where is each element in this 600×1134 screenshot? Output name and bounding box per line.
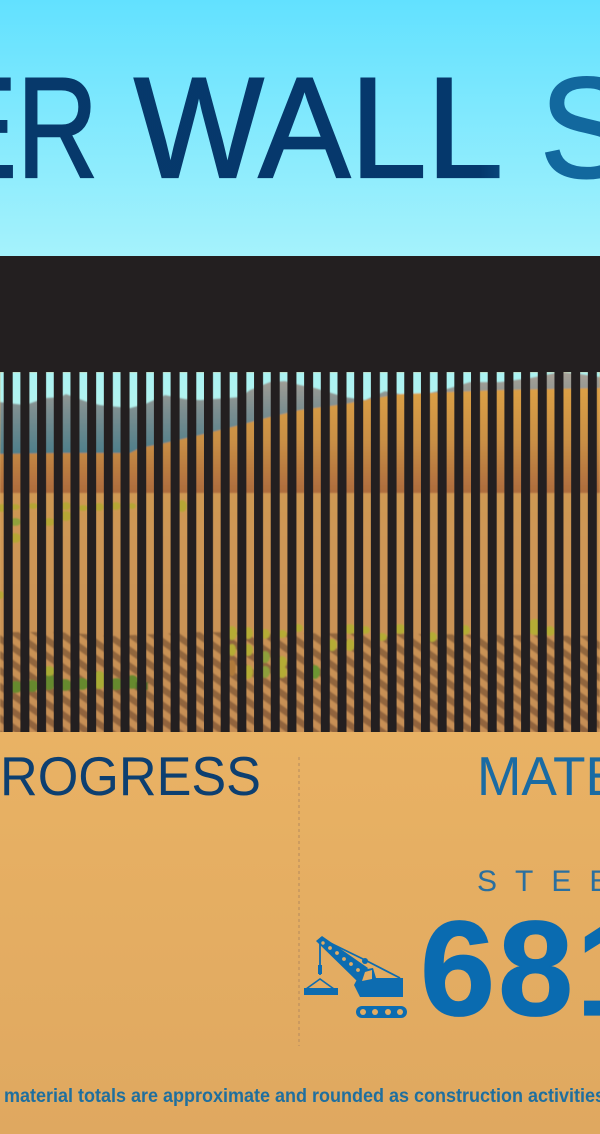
crane cab <box>354 968 403 997</box>
wall: solid top panel <box>0 256 600 372</box>
crane tracks <box>356 1006 407 1018</box>
desert landscape scene <box>0 372 600 733</box>
sky behind the fence <box>0 372 600 442</box>
icon: crane <box>304 936 407 1018</box>
scrub: lower left <box>9 666 148 693</box>
scrub: upper left <box>0 500 187 599</box>
foreground dune <box>0 388 600 494</box>
fence shadow stripes <box>0 632 600 733</box>
distant mountains <box>0 372 600 460</box>
sky background <box>0 0 600 256</box>
sand panel background <box>0 732 600 1134</box>
heading: progress: ROGRESS <box>0 745 261 807</box>
crane cable <box>320 938 400 978</box>
crane boom <box>316 936 368 982</box>
scrub: centre <box>227 619 555 679</box>
title <box>0 49 600 208</box>
desert floor <box>0 493 600 733</box>
title: WALL <box>134 49 503 208</box>
wall: steel slats <box>0 370 600 732</box>
crane load <box>306 979 334 989</box>
panel divider <box>298 757 300 1046</box>
